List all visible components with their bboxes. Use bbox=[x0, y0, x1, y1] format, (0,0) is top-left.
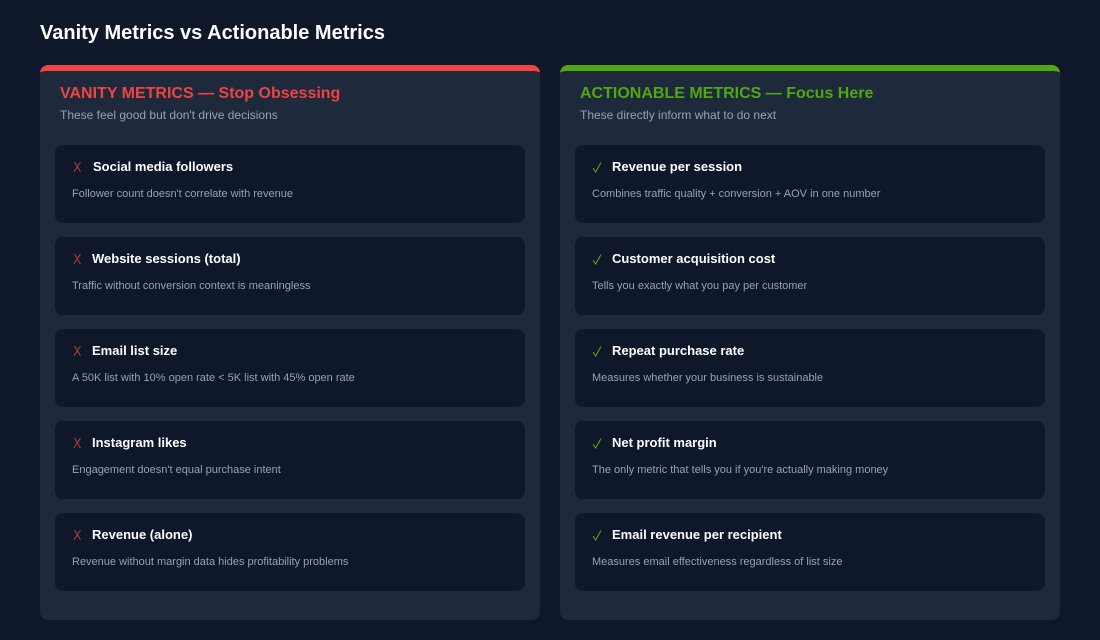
card: email list size bbox=[55, 329, 525, 407]
metric description: Follower count doesn't correlate with revenue bbox=[72, 188, 293, 200]
vanity subheading: These feel good but don't drive decisions bbox=[60, 108, 278, 122]
metric name: Net profit margin bbox=[612, 435, 717, 450]
card: net profit margin bbox=[575, 421, 1045, 499]
metric name: Email list size bbox=[92, 343, 177, 358]
card: email revenue per recipient bbox=[575, 513, 1045, 591]
icon: cross bbox=[73, 346, 81, 356]
icon: check bbox=[592, 162, 602, 173]
card: social media followers bbox=[55, 145, 525, 223]
metric description: Combines traffic quality + conversion + AOV in one number bbox=[592, 188, 880, 200]
icon: cross bbox=[73, 530, 81, 540]
actionable subheading: These directly inform what to do next bbox=[580, 108, 776, 122]
metric name: Social media followers bbox=[93, 159, 233, 174]
icon: check bbox=[592, 346, 602, 357]
metric name: Repeat purchase rate bbox=[612, 343, 744, 358]
panel: actionable metrics bbox=[560, 65, 1060, 620]
icon: check bbox=[592, 254, 602, 265]
metric description: Revenue without margin data hides profitability problems bbox=[72, 556, 348, 568]
card: customer acquisition cost bbox=[575, 237, 1045, 315]
metric name: Revenue per session bbox=[612, 159, 742, 174]
card: repeat purchase rate bbox=[575, 329, 1045, 407]
metric description: Engagement doesn't equal purchase intent bbox=[72, 464, 281, 476]
metric name: Email revenue per recipient bbox=[612, 527, 782, 542]
metric name: Customer acquisition cost bbox=[612, 251, 775, 266]
actionable heading: ACTIONABLE METRICS — Focus Here bbox=[580, 85, 873, 102]
metric name: Instagram likes bbox=[92, 435, 187, 450]
card: website sessions bbox=[55, 237, 525, 315]
icon: check bbox=[592, 530, 602, 541]
metric description: Measures email effectiveness regardless of list size bbox=[592, 556, 842, 568]
metric description: Measures whether your business is sustainable bbox=[592, 372, 823, 384]
metric name: Website sessions (total) bbox=[92, 251, 241, 266]
title: Vanity Metrics vs Actionable Metrics bbox=[40, 22, 385, 44]
metric description: Tells you exactly what you pay per customer bbox=[592, 280, 807, 292]
icon: cross bbox=[73, 254, 81, 264]
icon: cross bbox=[73, 438, 81, 448]
metric name: Revenue (alone) bbox=[92, 527, 192, 542]
icon: cross bbox=[73, 162, 81, 172]
metric description: A 50K list with 10% open rate < 5K list with 45% open rate bbox=[72, 372, 355, 384]
card: revenue per session bbox=[575, 145, 1045, 223]
panel: vanity metrics bbox=[40, 65, 540, 620]
vanity heading: VANITY METRICS — Stop Obsessing bbox=[60, 85, 340, 102]
metric description: Traffic without conversion context is meaningless bbox=[72, 280, 310, 292]
card: revenue alone bbox=[55, 513, 525, 591]
metric description: The only metric that tells you if you're actually making money bbox=[592, 464, 888, 476]
icon: check bbox=[592, 438, 602, 449]
card: instagram likes bbox=[55, 421, 525, 499]
